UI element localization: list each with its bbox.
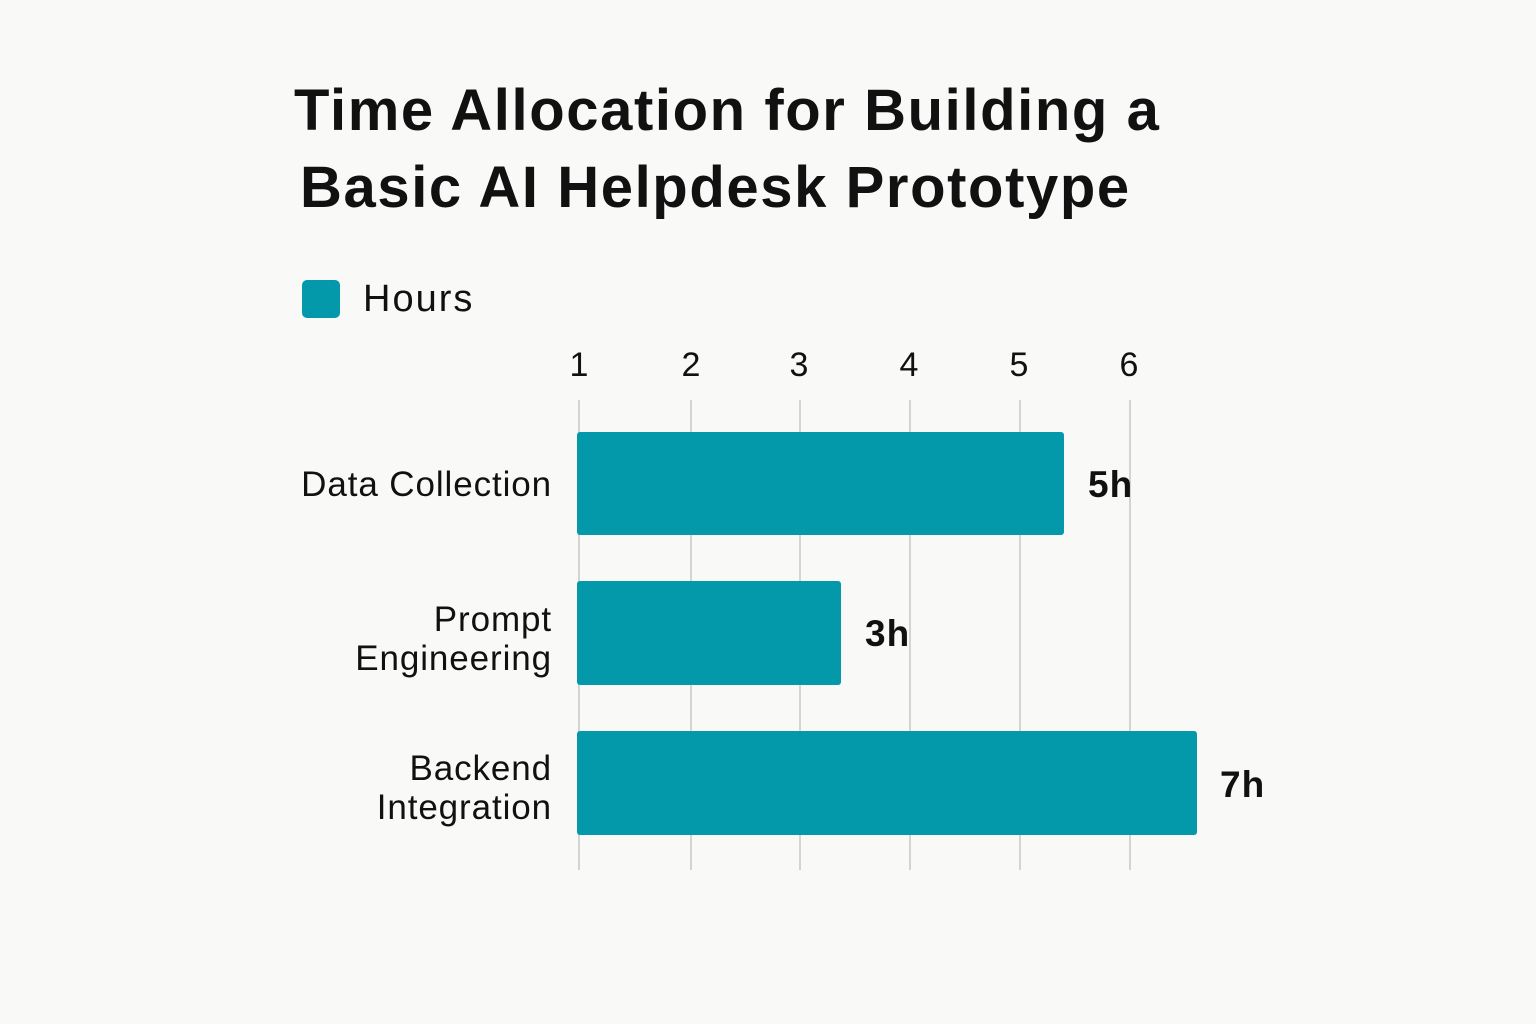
title bbox=[294, 78, 1160, 220]
bar chart: 6 bbox=[1120, 346, 1138, 384]
bar chart: 1 bbox=[570, 346, 588, 384]
bar chart: 7h bbox=[1220, 764, 1265, 805]
bar chart: 3h bbox=[865, 613, 910, 654]
legend bbox=[302, 278, 474, 320]
legend: Hours bbox=[363, 278, 474, 320]
bar chart: Data Collection bbox=[301, 465, 552, 504]
bar chart: Integration bbox=[377, 788, 552, 827]
bar chart: 3 bbox=[790, 346, 808, 384]
bar chart: 5h bbox=[1088, 464, 1133, 505]
bar chart: Engineering bbox=[355, 639, 552, 678]
bar chart: 2 bbox=[682, 346, 700, 384]
title: Time Allocation for Building a bbox=[294, 78, 1160, 143]
bar chart: 4 bbox=[900, 346, 918, 384]
bar chart: 5 bbox=[1010, 346, 1028, 384]
title: Basic AI Helpdesk Prototype bbox=[300, 155, 1131, 220]
bar chart: Prompt bbox=[434, 600, 552, 639]
bar chart: Backend bbox=[409, 749, 552, 788]
